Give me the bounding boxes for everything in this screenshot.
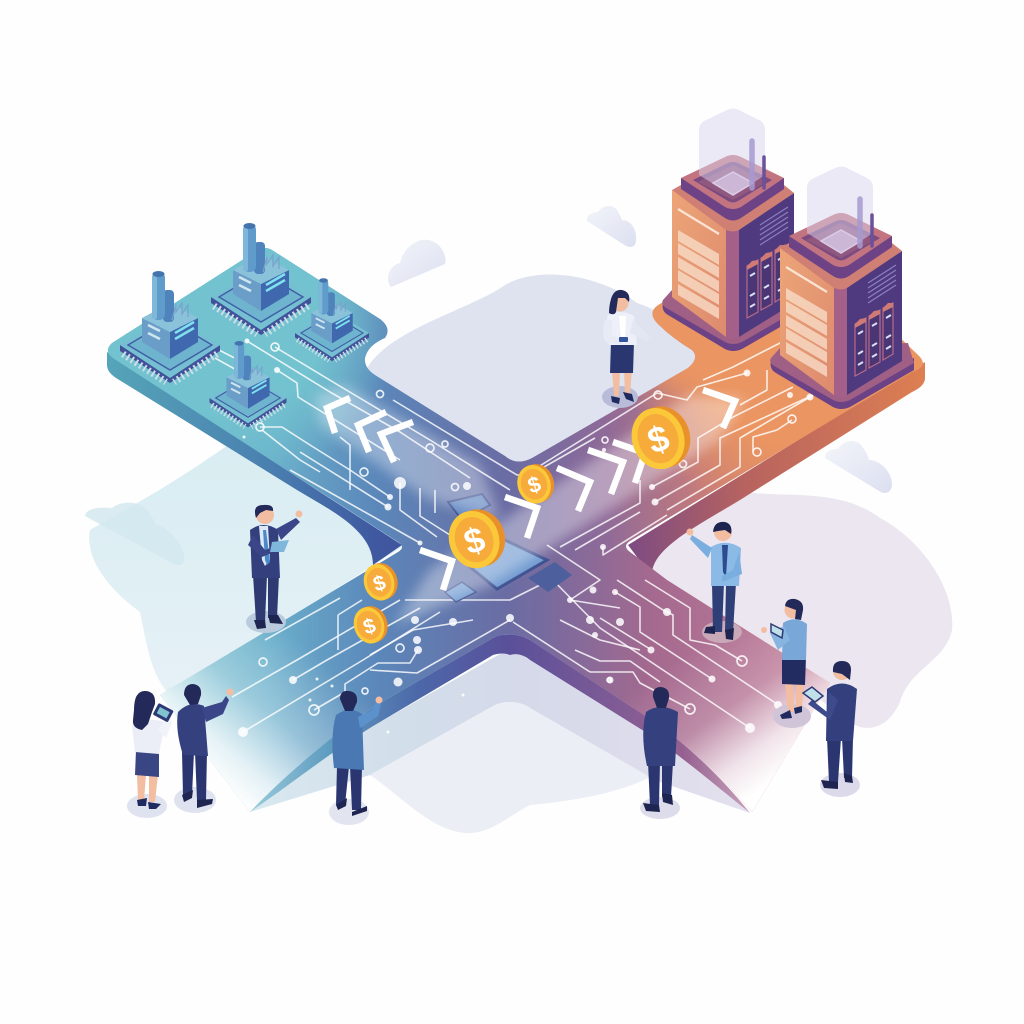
arrows: flow toward factories (327, 398, 413, 462)
platform end tints (108, 248, 923, 812)
lower-left arm fade (160, 552, 493, 812)
ribbon edge: lower left (250, 635, 510, 812)
light trail: upper-left flow (315, 385, 500, 520)
circuit nodes (238, 338, 814, 737)
factory: top (211, 223, 311, 335)
person: man with tablet right (803, 661, 860, 797)
background blob: right (640, 492, 952, 728)
server tower: front (770, 166, 914, 409)
coin: lower left lower: $ (360, 614, 379, 639)
background layer: mid lavender under crossing (250, 652, 750, 813)
arrows: flow toward servers (420, 390, 735, 590)
lower-right arm fade (530, 552, 830, 812)
traces: top-right arm (530, 343, 813, 555)
factory: front (210, 341, 286, 427)
coin: lower left upper: $ (370, 571, 389, 596)
coin: centre large: $ (459, 519, 490, 563)
person: man pointing right area (686, 522, 742, 643)
cloud: left pale (85, 503, 184, 565)
coin: centre small: $ (525, 471, 544, 499)
coin: lower left upper (359, 559, 402, 605)
traces: bottom-left arm (232, 585, 540, 732)
person: man bottom centre left (329, 691, 382, 825)
cloud: top right (587, 206, 636, 247)
coin: lower left lower (349, 602, 392, 648)
background blob: top centre (365, 275, 705, 480)
circuit traces (215, 341, 813, 732)
cloud: top middle (388, 240, 445, 287)
platform side thickness (107, 352, 925, 577)
X-shaped platform (107, 248, 925, 813)
traces: top-left arm (215, 341, 595, 543)
server tower: rear (662, 108, 806, 351)
traces: bottom-right arm (513, 545, 777, 728)
person: woman bottom left (127, 691, 174, 818)
coin: centre small (512, 460, 559, 508)
cloud: right (825, 441, 892, 493)
small chip: lower left (445, 582, 476, 602)
light trail: lower-left to upper-right flow (395, 395, 745, 625)
person: man bottom centre right (640, 687, 680, 819)
person: woman top centre (602, 290, 650, 408)
factory: far left (120, 271, 220, 383)
coin: top right (624, 399, 698, 476)
person: woman with tablet (761, 599, 811, 728)
factory: right (295, 278, 369, 361)
coin: top right: $ (642, 417, 674, 462)
ribbon edge: lower right (510, 635, 750, 813)
platform top surface (108, 238, 923, 812)
background blob: left (89, 440, 405, 695)
small chip: top (448, 494, 490, 520)
small chip: lower right (528, 562, 572, 592)
central chip cluster (445, 494, 572, 602)
person: man pointing left area (246, 505, 302, 633)
person: man bottom left (174, 684, 234, 813)
background blob: bottom light (370, 702, 650, 833)
circuit ring nodes (256, 343, 796, 715)
main chip (470, 540, 547, 589)
coin: centre large (441, 502, 513, 575)
